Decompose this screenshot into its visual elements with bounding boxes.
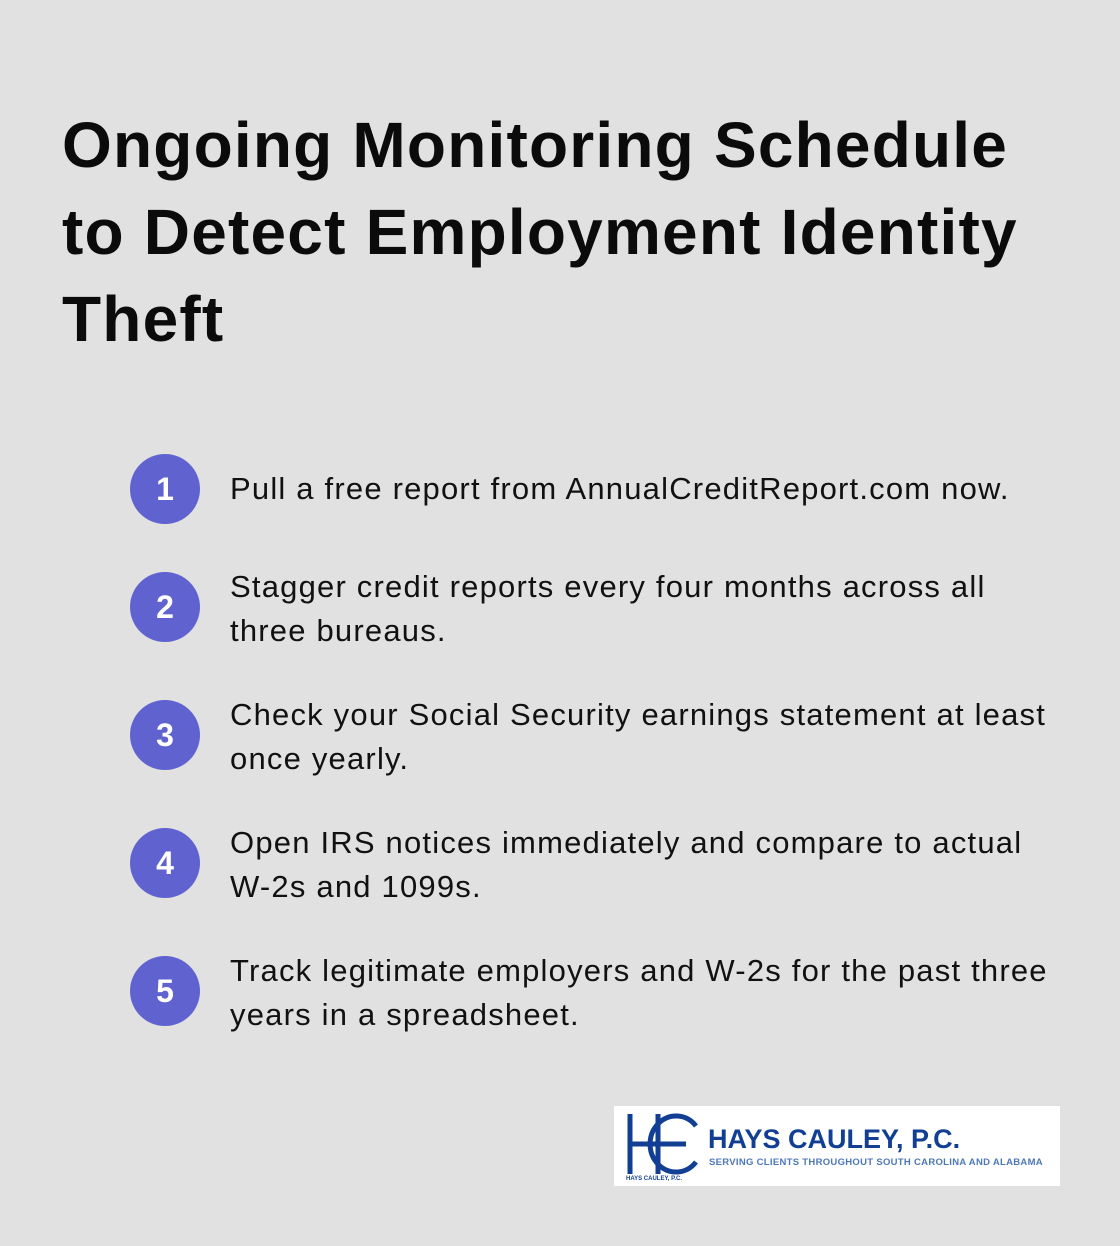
item 5 [130, 953, 1048, 1032]
item 1: Pull a free report from AnnualCreditReport.com now. [230, 471, 1010, 506]
item 5: 5 [156, 973, 174, 1009]
item 3: 3 [156, 717, 174, 753]
logo: SERVING CLIENTS THROUGHOUT SOUTH CAROLINA AND ALABAMA [709, 1157, 1043, 1168]
icon: HC monogram [628, 1114, 698, 1174]
item 4: 4 [156, 845, 174, 881]
item 4: Open IRS notices immediately and compare to actual [230, 825, 1022, 860]
item 3: Check your Social Security earnings statement at least [230, 697, 1046, 732]
title: Theft [62, 283, 224, 355]
item 5: years in a spreadsheet. [230, 997, 580, 1032]
item 4: W-2s and 1099s. [230, 869, 482, 904]
title [62, 109, 1018, 355]
logo: HAYS CAULEY, P.C. [708, 1124, 960, 1154]
item 2: three bureaus. [230, 613, 447, 648]
item 3 [130, 697, 1046, 776]
item 4 [130, 825, 1022, 904]
item 3: once yearly. [230, 741, 409, 776]
logo: HAYS CAULEY, P.C. [626, 1176, 682, 1182]
item 1: 1 [156, 471, 174, 507]
title: to Detect Employment Identity [62, 196, 1018, 268]
logo [614, 1106, 1060, 1186]
title: Ongoing Monitoring Schedule [62, 109, 1008, 181]
item 2 [130, 569, 986, 648]
item 2: Stagger credit reports every four months across all [230, 569, 986, 604]
item 1 [130, 454, 1010, 524]
item 2: 2 [156, 589, 174, 625]
item 5: Track legitimate employers and W-2s for the past three [230, 953, 1048, 988]
